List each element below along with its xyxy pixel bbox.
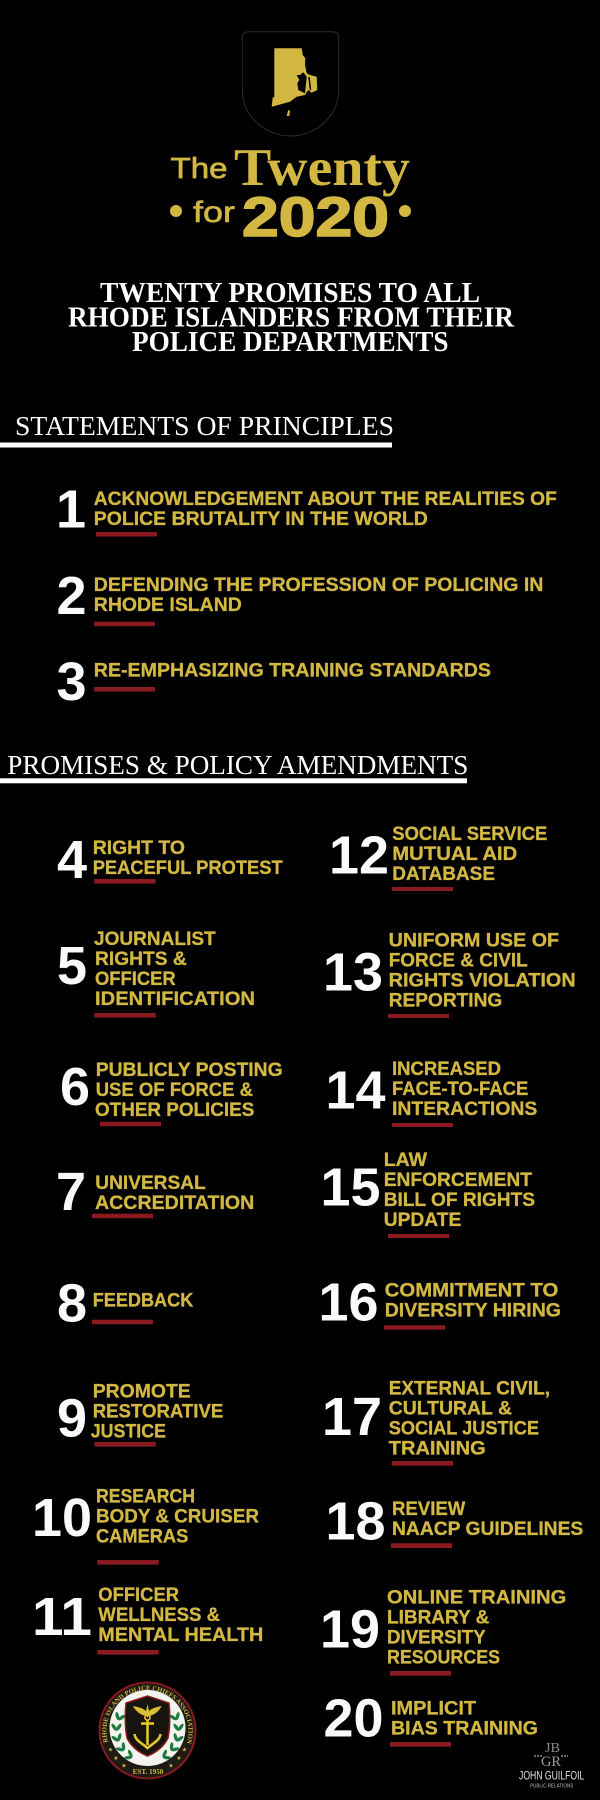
- item 20: [324, 1689, 538, 1749]
- item 16: DIVERSITY HIRING: [385, 1300, 561, 1322]
- item 8: FEEDBACK: [93, 1290, 193, 1312]
- item 13: [323, 930, 576, 1018]
- item 20: BIAS TRAINING: [391, 1717, 538, 1739]
- item 19: LIBRARY &: [387, 1606, 489, 1628]
- item 6: OTHER POLICIES: [95, 1099, 254, 1121]
- item 15: 15: [320, 1158, 380, 1218]
- item 18: NAACP GUIDELINES: [392, 1518, 583, 1540]
- item 17: SOCIAL JUSTICE: [389, 1417, 539, 1439]
- item 1: ACKNOWLEDGEMENT ABOUT THE REALITIES OF: [94, 488, 557, 510]
- icon: Rhode Island Police Chiefs Association seal: ★: [108, 1746, 113, 1754]
- icon: Rhode Island Police Chiefs Association seal: ★: [176, 1755, 182, 1762]
- logo: John Guilfoil Public Relations: GR: [541, 1754, 561, 1770]
- title: TWENTY PROMISES TO ALL: [100, 277, 480, 309]
- item 13: 13: [323, 943, 383, 1003]
- logo: The Twenty for 2020: for: [193, 196, 235, 229]
- item 7: ACCREDITATION: [95, 1192, 254, 1214]
- item 19: 19: [320, 1599, 380, 1659]
- item 3: RE-EMPHASIZING TRAINING STANDARDS: [94, 660, 491, 682]
- item 10: CAMERAS: [96, 1526, 188, 1548]
- item 6: PUBLICLY POSTING: [96, 1059, 283, 1081]
- heading: statements of principles: STATEMENTS OF PRINCIPLES: [15, 411, 394, 441]
- logo: The Twenty for 2020: [170, 32, 411, 248]
- item 10: BODY & CRUISER: [96, 1506, 259, 1528]
- item 16: 16: [318, 1273, 378, 1333]
- item 15: [320, 1149, 535, 1238]
- item 20: IMPLICIT: [391, 1697, 476, 1719]
- item 1: [56, 480, 557, 540]
- item 5: OFFICER: [95, 968, 176, 990]
- item 17: EXTERNAL CIVIL,: [389, 1377, 550, 1399]
- item 1: POLICE BRUTALITY IN THE WORLD: [94, 508, 428, 530]
- item 9: PROMOTE: [93, 1381, 191, 1403]
- item 14: [326, 1058, 537, 1127]
- icon: Rhode Island Police Chiefs Association seal: ★: [121, 1762, 127, 1770]
- title: POLICE DEPARTMENTS: [132, 326, 448, 358]
- item 4: RIGHT TO: [93, 837, 185, 859]
- item 5: JOURNALIST: [94, 928, 216, 950]
- item 12: MUTUAL AID: [392, 843, 517, 865]
- item 13: FORCE & CIVIL: [389, 950, 528, 972]
- item 11: MENTAL HEALTH: [98, 1624, 263, 1646]
- logo: The Twenty for 2020: The: [170, 153, 228, 185]
- item 11: [32, 1584, 263, 1655]
- item 20: 20: [324, 1689, 384, 1749]
- item 5: 5: [57, 936, 87, 996]
- logo: John Guilfoil Public Relations: JB: [545, 1741, 560, 1756]
- item 14: INCREASED: [392, 1058, 501, 1080]
- item 15: LAW: [384, 1149, 428, 1171]
- item 9: [57, 1381, 223, 1449]
- title: RHODE ISLANDERS FROM THEIR: [68, 302, 515, 334]
- item 6: [60, 1057, 283, 1126]
- item 12: [329, 823, 547, 891]
- item 19: ONLINE TRAINING: [387, 1586, 566, 1608]
- logo: John Guilfoil Public Relations: [519, 1741, 585, 1790]
- item 8: [57, 1274, 193, 1334]
- logo: John Guilfoil Public Relations: PUBLIC RELATIONS: [530, 1784, 574, 1790]
- icon: Rhode Island Police Chiefs Association seal: EST. 1950: [133, 1768, 164, 1776]
- icon: Rhode Island Police Chiefs Association seal: ★: [113, 1755, 119, 1762]
- item 18: [326, 1491, 583, 1551]
- item 13: REPORTING: [389, 990, 502, 1012]
- item 12: DATABASE: [392, 863, 495, 885]
- item 14: 14: [326, 1060, 386, 1120]
- icon: Rhode Island Police Chiefs Association seal: ★: [182, 1746, 187, 1754]
- item 11: WELLNESS &: [98, 1604, 220, 1626]
- logo: The Twenty for 2020: Twenty: [234, 139, 410, 197]
- item 18: REVIEW: [392, 1498, 466, 1520]
- item 3: [56, 652, 491, 712]
- item 13: UNIFORM USE OF: [389, 930, 559, 952]
- item 2: RHODE ISLAND: [94, 594, 242, 616]
- title: [68, 277, 515, 358]
- item 4: PEACEFUL PROTEST: [93, 857, 283, 879]
- item 2: 2: [56, 566, 87, 626]
- item 7: [56, 1162, 254, 1222]
- item 6: 6: [60, 1057, 90, 1117]
- item 4: [57, 830, 283, 890]
- item 19: DIVERSITY: [387, 1626, 486, 1648]
- item 8: 8: [57, 1274, 87, 1334]
- icon: Rhode Island Police Chiefs Association seal: RHODE ISLAND POLICE CHIEFS ASSOCIATION: [102, 1686, 193, 1744]
- item 9: 9: [57, 1389, 87, 1449]
- item 17: CULTURAL &: [389, 1397, 512, 1419]
- logo: The Twenty for 2020: 2020: [242, 185, 389, 248]
- item 15: BILL OF RIGHTS: [384, 1189, 535, 1211]
- item 7: 7: [56, 1162, 86, 1222]
- item 10: 10: [32, 1488, 92, 1548]
- item 2: [56, 566, 543, 626]
- icon: shield with Rhode Island map: [242, 32, 339, 136]
- item 12: SOCIAL SERVICE: [392, 823, 547, 845]
- item 15: ENFORCEMENT: [384, 1169, 532, 1191]
- item 14: FACE-TO-FACE: [392, 1078, 528, 1100]
- item 13: RIGHTS VIOLATION: [389, 970, 576, 992]
- item 2: DEFENDING THE PROFESSION OF POLICING IN: [94, 574, 543, 596]
- item 5: RIGHTS &: [95, 948, 187, 970]
- heading: promises and policy amendments: PROMISES & POLICY AMENDMENTS: [7, 750, 468, 780]
- item 11: OFFICER: [98, 1584, 179, 1606]
- item 1: 1: [56, 480, 86, 540]
- item 17: TRAINING: [389, 1437, 486, 1459]
- icon: Rhode Island Police Chiefs Association seal: [98, 1682, 196, 1780]
- item 9: JUSTICE: [91, 1421, 166, 1443]
- item 14: INTERACTIONS: [392, 1098, 537, 1120]
- icon: Rhode Island Police Chiefs Association seal: ★: [168, 1762, 174, 1770]
- item 10: RESEARCH: [96, 1486, 195, 1508]
- item 7: UNIVERSAL: [95, 1172, 206, 1194]
- item 5: IDENTIFICATION: [95, 988, 255, 1010]
- item 16: [318, 1273, 561, 1333]
- item 18: 18: [326, 1491, 386, 1551]
- item 9: RESTORATIVE: [93, 1401, 223, 1423]
- item 17: 17: [322, 1387, 382, 1447]
- item 15: UPDATE: [384, 1209, 461, 1231]
- item 12: 12: [329, 825, 389, 885]
- item 3: 3: [56, 652, 87, 712]
- item 11: 11: [32, 1587, 92, 1647]
- item 4: 4: [57, 830, 87, 890]
- item 6: USE OF FORCE &: [96, 1079, 253, 1101]
- item 17: [322, 1377, 550, 1466]
- item 19: RESOURCES: [387, 1646, 500, 1668]
- item 10: [32, 1486, 259, 1565]
- item 19: [320, 1586, 566, 1676]
- item 16: COMMITMENT TO: [385, 1280, 558, 1302]
- item 5: [57, 928, 255, 1018]
